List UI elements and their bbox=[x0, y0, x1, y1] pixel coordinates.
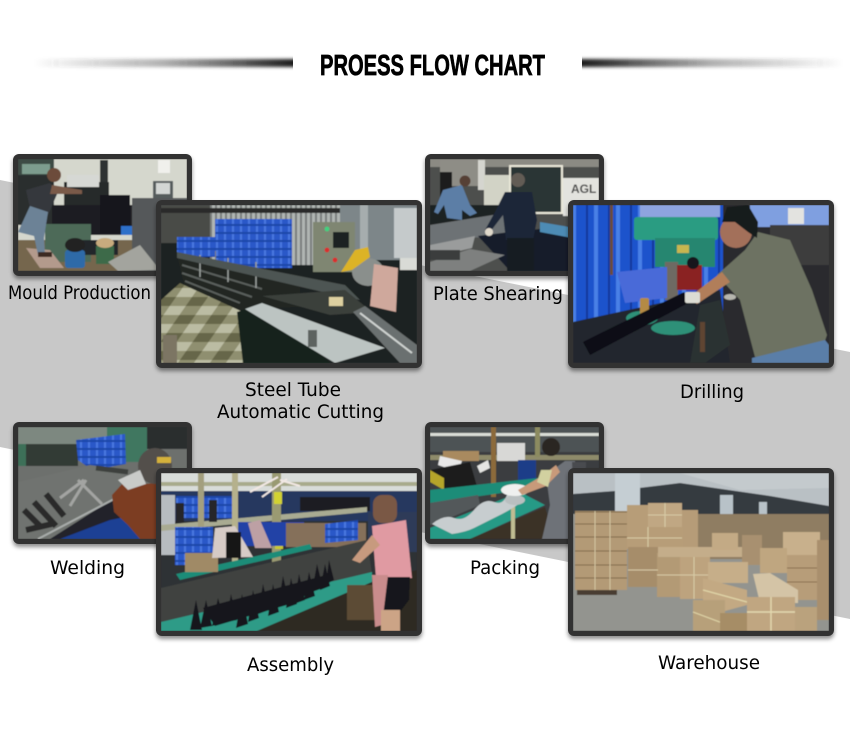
title: PROESS FLOW CHART bbox=[320, 50, 545, 82]
label: packing: Packing bbox=[470, 557, 540, 579]
panel: drilling bbox=[568, 200, 834, 368]
label: plate shearing: Plate Shearing bbox=[433, 283, 563, 305]
panel: assembly bbox=[156, 468, 422, 636]
label: warehouse: Warehouse bbox=[658, 652, 760, 674]
panel: plate shearing bbox=[425, 154, 604, 276]
label: drilling: Drilling bbox=[680, 381, 744, 403]
label: welding: Welding bbox=[50, 557, 125, 579]
panel: packing bbox=[425, 422, 604, 544]
label: steel tube automatic cutting: Automatic Cutting bbox=[217, 401, 384, 423]
label: assembly: Assembly bbox=[247, 654, 334, 676]
panel: plate shearing: AGL bbox=[571, 182, 596, 196]
title rule: right bbox=[582, 59, 843, 67]
panel: welding bbox=[13, 422, 192, 544]
title rule: left bbox=[34, 59, 293, 67]
panel: steel tube automatic cutting bbox=[156, 200, 422, 368]
panel: warehouse bbox=[568, 468, 834, 636]
label: steel tube automatic cutting bbox=[217, 379, 384, 423]
panel: mould production bbox=[13, 154, 192, 276]
label: steel tube automatic cutting: Steel Tube bbox=[245, 379, 341, 401]
label: mould production: Mould Production bbox=[8, 282, 151, 304]
diagonal grey background band bbox=[0, 180, 850, 619]
